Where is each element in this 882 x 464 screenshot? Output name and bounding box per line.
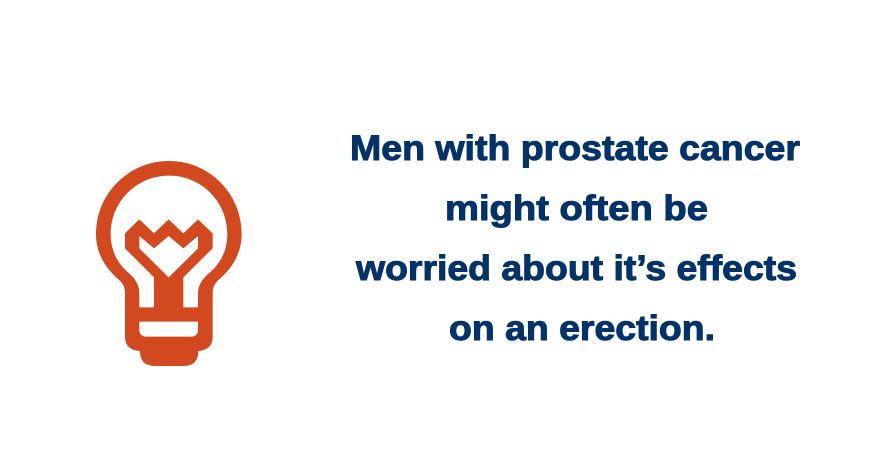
- text block: message: [350, 129, 800, 348]
- text line 2: might often be: [445, 189, 708, 228]
- text line 1: Men with prostate cancer: [350, 129, 800, 168]
- icon: light bulb: [96, 161, 242, 366]
- text line 3: worried about it’s effects: [355, 249, 797, 288]
- text line 4: on an erection.: [449, 309, 715, 348]
